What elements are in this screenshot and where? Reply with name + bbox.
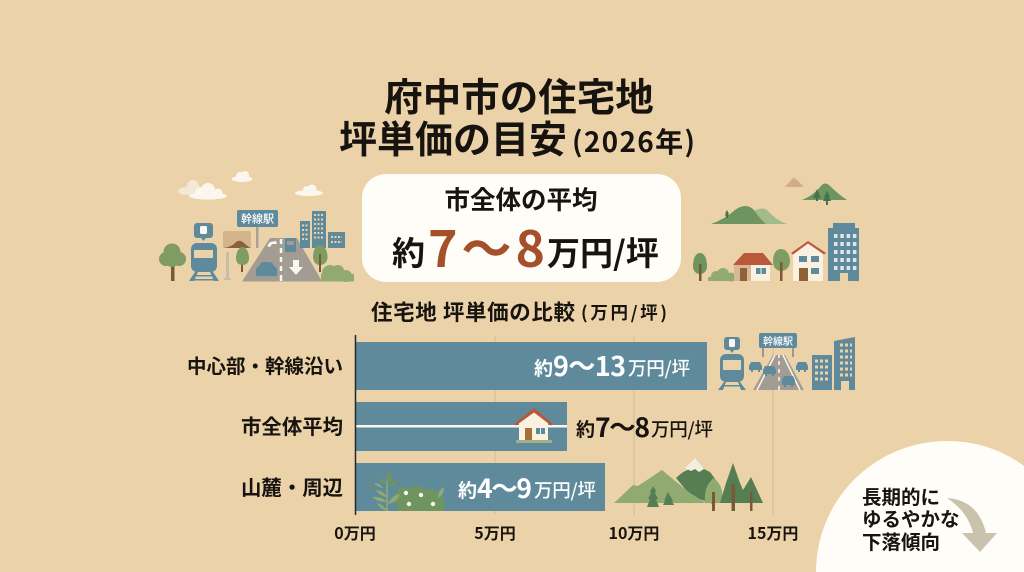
house 2: [793, 243, 823, 281]
house 1: [734, 263, 752, 281]
icon: house: [514, 408, 553, 443]
trend text: 長期的に: [862, 481, 940, 510]
bush: [708, 268, 737, 282]
bar: 市全体平均: 約: [576, 415, 595, 442]
bar: 中心部・幹線沿い: 約: [534, 354, 553, 381]
axis labels: 5万円: [474, 520, 516, 544]
panel: city average callout: 約: [392, 227, 425, 275]
chart heading: 住宅地 坪単価の比較: [371, 296, 575, 327]
category labels: [187, 350, 343, 501]
station sign: [237, 210, 278, 248]
bar: 市全体平均: 万円/坪: [651, 416, 713, 442]
bar: 山麓・周辺: [356, 463, 605, 511]
bar: 山麓・周辺: 万円/坪: [534, 477, 596, 503]
title: (2026年): [572, 121, 695, 161]
trend text: [862, 481, 960, 555]
axis labels: 10万円: [609, 520, 659, 544]
icon: left city illustration: [159, 171, 354, 282]
trend text: ゆるやかな: [862, 503, 960, 532]
icon: shrubs: [367, 471, 445, 511]
category labels: 中心部・幹線沿い: [187, 350, 343, 379]
title: 坪単価の目安: [339, 109, 567, 164]
right tree and bush: [313, 245, 328, 265]
icon: train, station and road: [718, 333, 855, 390]
chart heading: [371, 296, 667, 327]
category labels: 山麓・周辺: [241, 471, 343, 501]
axis labels: 0万円: [334, 520, 376, 544]
chart heading: (万円/坪): [581, 300, 667, 325]
icon: right town illustration: [693, 178, 859, 282]
category labels: 市全体平均: [241, 410, 343, 440]
icon: downward arrow: [947, 498, 997, 552]
buildings: [300, 211, 345, 248]
brown mountain sign: [223, 231, 251, 248]
icon: mountains: [614, 458, 763, 511]
tree: [773, 249, 790, 271]
panel: city average callout: 市全体の平均: [444, 180, 598, 217]
panel: long-term trend: [816, 441, 1024, 572]
title: [339, 67, 695, 164]
panel: city average callout: [362, 174, 681, 282]
axis line: [354, 335, 356, 515]
title: 府中市の住宅地: [384, 67, 654, 123]
bar: 山麓・周辺: 約: [458, 476, 477, 503]
train: [189, 223, 219, 281]
left tree: [171, 258, 174, 281]
bar: 中心部・幹線沿い: [356, 342, 707, 390]
small tree: [693, 253, 707, 274]
axis labels: 15万円: [748, 520, 798, 544]
tower: [828, 223, 859, 281]
road: [242, 238, 322, 282]
axis labels: [334, 520, 798, 544]
icon: train, station and road: 幹線駅: [763, 333, 793, 348]
trend text: 下落傾向: [862, 526, 940, 555]
bar: 中心部・幹線沿い: 9～13: [553, 345, 626, 384]
bar chart: [187, 335, 798, 544]
bar: 市全体平均: 7～8: [595, 406, 650, 445]
hills: [785, 178, 804, 187]
station sign: 幹線駅: [241, 210, 274, 226]
bar: 山麓・周辺: 4～9: [477, 467, 532, 506]
panel: city average callout: 万円/坪: [547, 227, 659, 275]
bar: 中心部・幹線沿い: 万円/坪: [628, 355, 690, 381]
small tree: [241, 258, 243, 272]
panel: city average callout: 7～8: [428, 210, 545, 282]
bar: 市全体平均: [356, 402, 713, 451]
